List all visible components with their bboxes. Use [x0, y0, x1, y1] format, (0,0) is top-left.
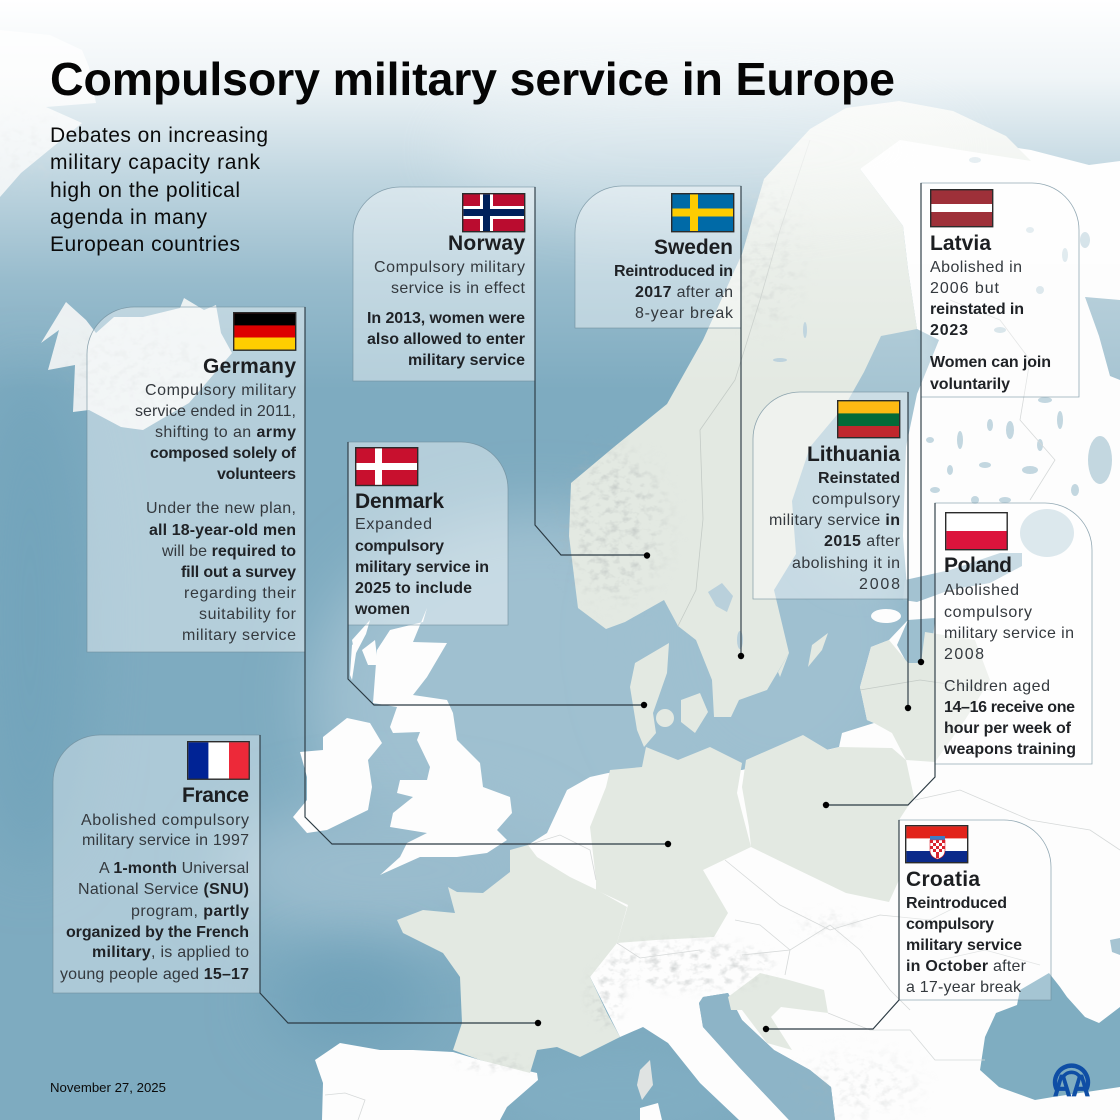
Sweden text	[614, 236, 734, 322]
flag: Lithuania	[838, 401, 900, 438]
France text: program, partly	[131, 903, 249, 920]
Sweden text: Reintroduced in	[614, 263, 733, 280]
Germany text: service ended in 2011,	[135, 403, 296, 420]
Croatia leader line	[766, 820, 899, 1029]
Poland leader line	[826, 503, 935, 805]
Germany text: Under the new plan,	[146, 500, 296, 517]
panel: Lithuania	[753, 392, 911, 711]
Portugal and Spain border	[325, 1093, 365, 1120]
icon: AA logo: AA	[1053, 1068, 1090, 1103]
Poland text: Abolished	[944, 582, 1019, 599]
Lithuania panel background	[753, 392, 908, 599]
Lithuania text: military service in	[769, 512, 900, 529]
intro text: European countries	[50, 233, 240, 256]
intro text: agenda in many	[50, 206, 208, 229]
Gulf of Riga	[897, 618, 935, 665]
Norway text: In 2013, women were	[367, 310, 525, 327]
Denmark text: women	[354, 601, 410, 618]
panel: Denmark	[348, 442, 647, 708]
Germany text: fill out a survey	[181, 564, 296, 581]
Poland text: weapons training	[943, 741, 1076, 758]
France text: organized by the French	[66, 924, 249, 941]
Lithuania text: abolishing it in	[792, 555, 900, 572]
Poland text: 14–16 receive one	[944, 699, 1075, 716]
Sweden leader line	[740, 186, 742, 656]
Lithuania text: 2008	[859, 576, 900, 593]
Germany panel background	[87, 307, 305, 652]
Lithuania marker	[905, 705, 911, 711]
Latvia panel background	[921, 183, 1079, 397]
Croatia text: a 17-year break	[906, 979, 1022, 996]
Latvia text: Latvia	[930, 232, 991, 255]
flag: Latvia	[931, 190, 993, 227]
Lithuania text: Reinstated	[818, 470, 900, 487]
Croatia panel background	[899, 820, 1051, 1000]
France text: young people aged 15–17	[60, 966, 249, 983]
Germany text: composed solely of	[150, 445, 297, 462]
Latvia text: reinstated in	[930, 301, 1024, 318]
intro text: military capacity rank	[50, 151, 260, 174]
Denmark marker	[641, 702, 647, 708]
Croatia text: in October after	[906, 958, 1027, 975]
Latvia text: Women can join	[930, 354, 1051, 371]
Poland marker	[823, 802, 829, 808]
France text	[60, 784, 249, 983]
country borders	[528, 140, 1120, 1060]
top white fade	[0, 0, 1120, 390]
Germany text	[135, 355, 297, 644]
France panel background	[53, 735, 260, 993]
flag: Germany	[234, 313, 296, 350]
Croatia text	[906, 868, 1027, 996]
France text: Abolished compulsory	[81, 812, 249, 829]
United Kingdom	[373, 608, 512, 875]
Oland	[778, 653, 789, 677]
intro text: Debates on increasing	[50, 124, 268, 147]
Poland text: 2008	[944, 646, 984, 663]
Poland text: Poland	[944, 554, 1012, 577]
flag: France	[188, 742, 249, 779]
France	[397, 845, 627, 1073]
Germany text: suitability for	[199, 606, 297, 623]
Denmark	[630, 643, 669, 747]
panel: France	[53, 735, 541, 1026]
France text: military service in 1997	[82, 832, 249, 849]
intro text: high on the political	[50, 179, 240, 202]
panel: Sweden	[575, 186, 744, 659]
Lithuania text: Lithuania	[807, 443, 900, 466]
flag: Norway	[463, 194, 525, 232]
France marker	[535, 1020, 541, 1026]
Gotland	[808, 633, 828, 667]
Poland text: compulsory	[944, 604, 1032, 621]
Croatia marker	[763, 1026, 769, 1032]
panel: Poland	[823, 503, 1092, 808]
France text: France	[182, 784, 249, 807]
Germany text: will be required to	[161, 543, 296, 560]
Denmark text	[354, 490, 489, 618]
Sweden text: 2017 after an	[635, 284, 733, 301]
Denmark text: Denmark	[355, 490, 444, 513]
Latvia text: 2006 but	[930, 280, 1000, 297]
land: continental Europe	[528, 130, 1120, 1120]
Norway panel background	[353, 187, 535, 381]
Danish islands	[656, 693, 708, 733]
Poland panel background	[935, 503, 1092, 764]
France text: National Service (SNU)	[78, 881, 249, 898]
Ireland	[293, 718, 382, 833]
Sweden text: Sweden	[654, 236, 733, 259]
title: Compulsory military service in Europe	[50, 53, 895, 105]
Poland text: Children aged	[944, 678, 1050, 695]
Croatia text: military service	[906, 937, 1022, 954]
Germany text: all 18-year-old men	[149, 522, 296, 539]
Croatia text: compulsory	[906, 916, 994, 933]
Latvia and Lithuania	[860, 632, 990, 762]
Lithuania text: compulsory	[812, 491, 900, 508]
Denmark text: 2025 to include	[355, 580, 472, 597]
Sweden panel background	[575, 186, 741, 328]
panel: Germany	[87, 307, 671, 847]
Poland text: hour per week of	[944, 720, 1072, 737]
France leader line	[260, 735, 538, 1023]
pale sky over Norway	[440, 80, 960, 220]
Denmark panel background	[348, 442, 508, 625]
panel: Norway	[353, 187, 650, 559]
Sardinia	[640, 1103, 662, 1120]
Sweden text: 8-year break	[635, 305, 734, 322]
lakes	[926, 157, 1120, 557]
Norway marker	[644, 552, 650, 559]
Sea of Azov	[1110, 938, 1120, 955]
gulf of Finland	[903, 553, 1022, 602]
Croatia	[728, 973, 828, 1050]
Latvia text: Abolished in	[930, 259, 1022, 276]
Poland text	[943, 554, 1076, 758]
Germany text: military service	[182, 627, 296, 644]
Norway text: Compulsory military	[374, 259, 525, 276]
Sweden marker	[738, 653, 744, 659]
flag: Croatia	[906, 826, 968, 863]
Croatia text: Croatia	[906, 868, 980, 891]
Germany	[590, 747, 751, 943]
Germany text: regarding their	[184, 585, 297, 602]
France text: A 1-month Universal	[99, 860, 249, 877]
Poland text: military service in	[944, 625, 1074, 642]
Spain	[315, 1043, 538, 1120]
Latvia text: 2023	[930, 322, 968, 339]
Norway leader line	[535, 187, 647, 555]
Greenland	[0, 30, 96, 197]
Latvia marker	[918, 659, 924, 665]
Germany leader line	[305, 307, 668, 844]
Latvia text	[930, 232, 1051, 393]
Germany text: Compulsory military	[145, 382, 296, 399]
lakes in Sweden	[708, 322, 807, 649]
date: November 27, 2025	[50, 1080, 166, 1095]
Norway and Sweden	[569, 101, 1031, 717]
Adriatic shade	[699, 993, 835, 1120]
Germany text: Germany	[203, 355, 296, 378]
Norway text: service is in effect	[391, 280, 526, 297]
Denmark text: compulsory	[355, 538, 444, 555]
flag: Poland	[946, 513, 1007, 550]
Croatia text: Reintroduced	[906, 895, 1007, 912]
Lithuania leader line	[907, 392, 909, 708]
Corsica	[637, 1060, 653, 1100]
Poland	[742, 735, 914, 902]
Latvia text: voluntarily	[930, 376, 1010, 393]
Denmark leader line	[348, 442, 644, 705]
Denmark text: military service in	[355, 559, 489, 576]
flag: Sweden	[672, 194, 734, 232]
Germany text: volunteers	[217, 466, 296, 483]
Scottish islands	[350, 620, 378, 680]
terrain texture	[80, 224, 917, 1116]
Norway text: also allowed to enter	[367, 331, 525, 348]
Denmark text: Expanded	[355, 516, 432, 533]
Germany marker	[665, 841, 671, 847]
intro text	[50, 124, 268, 256]
panel: Latvia	[918, 183, 1079, 665]
Black Sea	[980, 973, 1120, 1100]
Norway text: military service	[408, 352, 525, 369]
Lithuania text	[769, 443, 901, 593]
Latvia leader line	[920, 183, 922, 662]
France text: military, is applied to	[92, 944, 249, 961]
Germany text: shifting to an army	[155, 424, 296, 441]
Saaremaa	[871, 609, 901, 623]
flag: Denmark	[356, 448, 418, 486]
Norway text	[367, 232, 526, 369]
Norway text: Norway	[448, 232, 525, 255]
Lithuania text: 2015 after	[824, 533, 901, 550]
Iceland	[41, 298, 232, 430]
panel: Croatia	[763, 820, 1051, 1032]
